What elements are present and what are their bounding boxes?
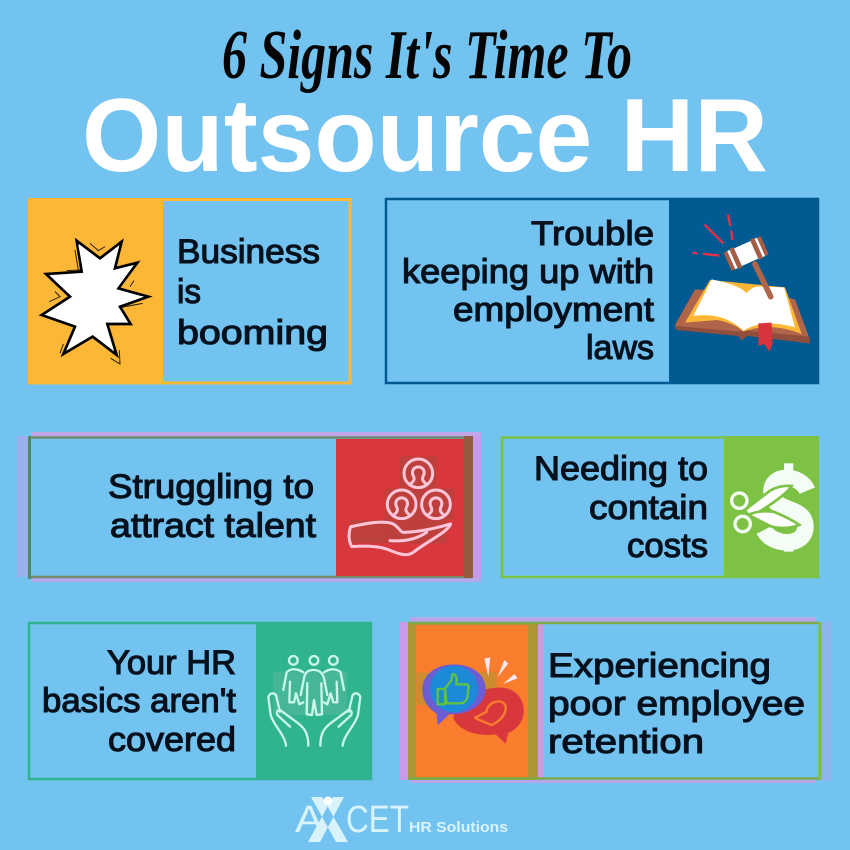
text: attract talent: Struggling to bbox=[108, 468, 314, 506]
text: contain costs: Needing to bbox=[534, 450, 708, 488]
text: business is booming: is bbox=[177, 273, 201, 311]
text: employee retention bbox=[548, 647, 805, 761]
icon: scissors and dollar bbox=[732, 463, 807, 552]
icon: chat bubbles with thumbs up and heart bbox=[417, 657, 524, 744]
panel: business is booming bbox=[28, 198, 350, 384]
text: employment laws: Trouble bbox=[531, 215, 654, 253]
text: contain costs: contain bbox=[589, 489, 708, 527]
logo: Axcet HR Solutions bbox=[295, 796, 508, 842]
text: HR basics: Your HR bbox=[107, 644, 236, 682]
text: attract talent: attract talent bbox=[110, 507, 317, 545]
panel: employee retention bbox=[400, 617, 832, 783]
text: HR basics bbox=[42, 644, 237, 759]
logo: Axcet HR Solutions: HR Solutions bbox=[409, 819, 508, 836]
text: attract talent bbox=[108, 468, 317, 545]
text: HR basics: covered bbox=[108, 721, 236, 759]
icon: gavel and book bbox=[675, 215, 810, 352]
title script line: 6 Signs It's Time To bbox=[222, 17, 632, 94]
text: contain costs bbox=[534, 450, 708, 565]
panel: employment laws bbox=[386, 198, 819, 384]
text: employee retention: retention bbox=[548, 723, 704, 761]
text: employment laws bbox=[402, 215, 655, 367]
text: business is booming: Business bbox=[177, 233, 320, 271]
text: employee retention: Experiencing bbox=[548, 647, 771, 685]
panel: attract talent bbox=[17, 432, 481, 582]
title main line: Outsource HR bbox=[82, 78, 768, 194]
icon: starburst bbox=[42, 241, 148, 364]
icon: hands holding people bbox=[268, 656, 360, 746]
panel: contain costs bbox=[502, 436, 819, 578]
text: employment laws: employment bbox=[453, 291, 655, 329]
panel: HR basics bbox=[29, 622, 372, 780]
text: business is booming: booming bbox=[177, 314, 328, 352]
logo: Axcet HR Solutions: A bbox=[295, 799, 324, 841]
text: employee retention: poor employee bbox=[548, 685, 805, 723]
logo: Axcet HR Solutions: CET bbox=[346, 799, 409, 841]
text: employment laws: keeping up with bbox=[402, 253, 654, 291]
icon: hand holding people bbox=[349, 457, 453, 555]
text: contain costs: costs bbox=[627, 527, 708, 565]
text: business is booming bbox=[177, 233, 328, 352]
text: employment laws: laws bbox=[586, 329, 654, 367]
text: HR basics: basics aren't bbox=[42, 682, 237, 720]
